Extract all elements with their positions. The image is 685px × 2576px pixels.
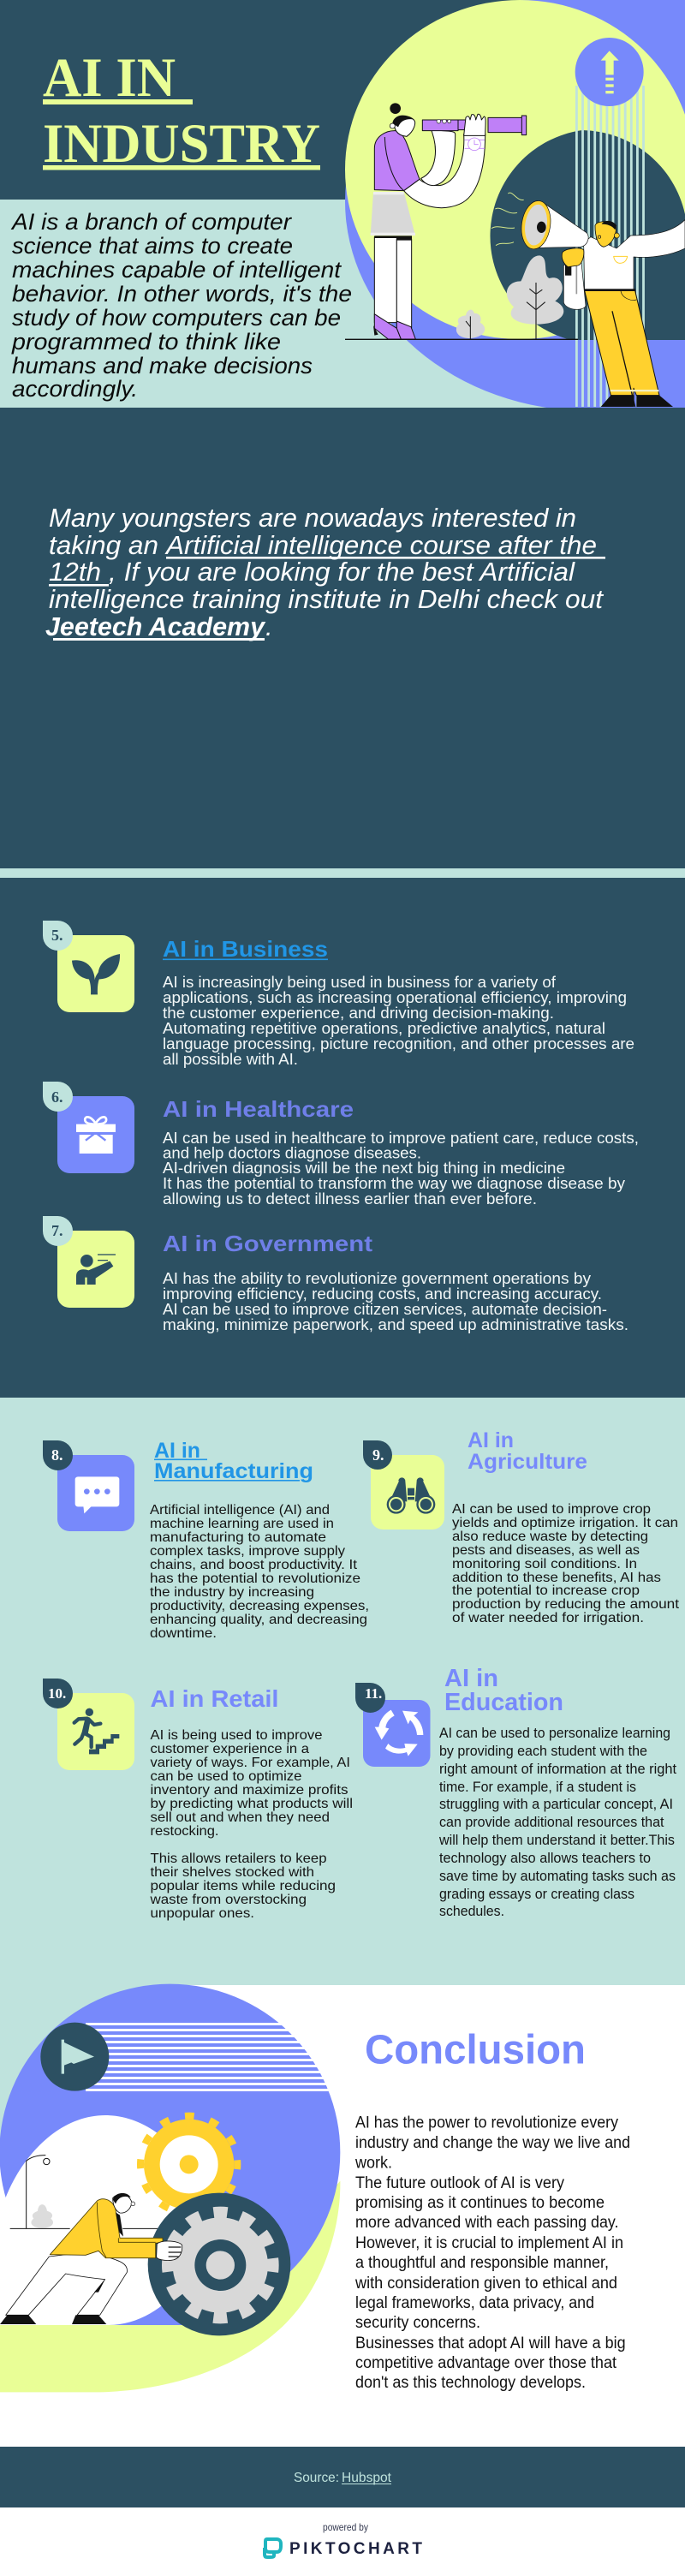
icon: presenter xyxy=(43,1216,134,1308)
illustration: grey gear xyxy=(148,2193,290,2335)
text block: AI in Manufacturing: manufacturing to automate xyxy=(150,1530,326,1545)
text block: conclusion: industry and change the way we live and xyxy=(355,2134,630,2152)
text block: AI in Government: AI can be used to improve citizen services, automate decision- xyxy=(163,1301,607,1318)
text block: AI in Business: Automating repetitive operations, predictive analytics, natural xyxy=(163,1020,605,1037)
text block: conclusion: legal frameworks, data privacy, and xyxy=(355,2294,594,2312)
text block: conclusion: with consideration given to ethical and xyxy=(354,2275,617,2293)
text block: conclusion: The future outlook of AI is very xyxy=(355,2174,564,2192)
text block: AI in Retail: customer experience in a xyxy=(151,1742,309,1756)
text block: introduction: study of how computers can be xyxy=(12,305,341,331)
text block: conclusion xyxy=(354,2028,630,2392)
text block: conclusion: Conclusion xyxy=(365,2028,586,2072)
illustration: yellow gear xyxy=(136,2112,241,2217)
text block: AI in Agriculture: monitoring soil conditions. In xyxy=(452,1557,637,1571)
text block: AI in Manufacturing: Manufacturing xyxy=(154,1459,313,1483)
text block: AI in Retail: AI in Retail xyxy=(151,1685,279,1712)
text block: AI in Education: right amount of information at the right xyxy=(439,1761,676,1777)
icon: plant: 5. xyxy=(51,927,63,944)
text block: AI in Business xyxy=(163,936,634,1068)
text block: AI in Healthcare: It has the potential to transform the way we diagnose disease by xyxy=(163,1175,625,1192)
icon: runner on stairs: 10. xyxy=(48,1685,66,1702)
text block: AI in Education: AI can be used to personalize learning xyxy=(439,1725,670,1741)
text block: AI in Education: by providing each student with the xyxy=(439,1743,647,1759)
text block: conclusion: security concerns. xyxy=(355,2314,480,2332)
text block: AI in Education: save time by automating tasks such as xyxy=(439,1868,676,1884)
text block: AI in Business: the customer experience, and driving decision-making. xyxy=(163,1005,554,1022)
text block: introduction: accordingly. xyxy=(12,376,138,402)
text block: course callout xyxy=(45,503,605,641)
text block: conclusion: promising as it continues to become xyxy=(355,2194,605,2212)
text block: course callout: . xyxy=(265,611,273,641)
icon: binoculars xyxy=(363,1440,444,1530)
icon: arrow up badge xyxy=(575,38,644,106)
footer: source xyxy=(0,2447,685,2507)
icon: recycle arrows xyxy=(355,1683,430,1767)
text block: AI in Government: AI has the ability to revolutionize government operations by xyxy=(163,1270,591,1287)
footer: Piktochart logo: PIKTOCHART xyxy=(289,2540,422,2558)
illustration: horizontal stripes xyxy=(86,2023,340,2091)
text block: AI in Healthcare xyxy=(163,1096,639,1208)
icon: chat bubble: 8. xyxy=(51,1446,63,1464)
text block: AI in Manufacturing: downtime. xyxy=(150,1626,217,1641)
text block: AI in Retail: inventory and maximize profits xyxy=(151,1783,348,1798)
text block: AI in Business: applications, such as increasing operational efficiency, improving xyxy=(163,989,627,1006)
text block: AI in Government xyxy=(163,1231,628,1333)
text block: AI in Business: AI is increasingly being used in business for a variety of xyxy=(163,974,557,991)
panel: business, healthcare, government xyxy=(0,878,685,1398)
text block: AI in Education: time. For example, if a student is xyxy=(439,1779,636,1795)
text block: AI in Manufacturing: the industry by increasing xyxy=(150,1585,314,1600)
text block: AI in Retail: AI is being used to improve xyxy=(151,1728,323,1743)
text block: AI in Retail: unpopular ones. xyxy=(151,1906,254,1921)
text block: course callout: , If you are looking for the best Artificial xyxy=(109,557,575,587)
icon: presenter: 7. xyxy=(51,1222,63,1239)
text block: introduction: science that aims to create xyxy=(12,233,293,259)
text block: AI in Retail: This allows retailers to keep xyxy=(151,1852,327,1866)
illustration: man with megaphone xyxy=(491,193,685,407)
text block: AI in Manufacturing: AI in xyxy=(154,1439,200,1463)
text block: conclusion: work. xyxy=(354,2155,392,2172)
text block: AI in Manufacturing: complex tasks, improve supply xyxy=(150,1544,345,1559)
text block: AI in Manufacturing: productivity, decreasing expenses, xyxy=(150,1599,369,1613)
text block: AI in Retail: their shelves stocked with xyxy=(151,1865,314,1880)
text block: introduction: programmed to think like xyxy=(11,329,281,355)
text block: AI in Education: grading essays or creating class xyxy=(439,1886,634,1902)
illustration: ground line xyxy=(345,339,578,340)
text block: course callout: taking an xyxy=(49,530,158,560)
text block: AI in Education: can provide additional resources that xyxy=(439,1814,664,1830)
text block: AI in Education: struggling with a particular concept, AI xyxy=(439,1796,673,1812)
text block: AI in Manufacturing xyxy=(150,1439,369,1641)
text block: course callout: intelligence training institute in Delhi check out xyxy=(49,584,604,614)
icon: recycle arrows: 11. xyxy=(365,1685,382,1702)
illustration: woman with telescope xyxy=(371,103,563,339)
text block: introduction: humans and make decisions xyxy=(12,353,313,379)
text block: AI in Education: technology also allows teachers to xyxy=(439,1850,651,1866)
text block: conclusion: a thoughtful and responsible manner, xyxy=(355,2254,609,2272)
icon: plant xyxy=(43,921,134,1012)
text block: conclusion: don't as this technology develops. xyxy=(355,2374,586,2392)
icon: gift: 6. xyxy=(51,1088,63,1106)
text block: AI in Government: improving efficiency, reducing costs, and increasing accuracy. xyxy=(163,1285,602,1303)
text block: course callout: 12th xyxy=(49,557,101,587)
text block: AI in Manufacturing: has the potential to revolutionize xyxy=(150,1571,360,1586)
text block: AI in Agriculture: addition to these benefits, AI has xyxy=(452,1571,661,1585)
panel: course callout xyxy=(0,408,685,878)
text block: AI in Healthcare: AI in Healthcare xyxy=(163,1096,354,1122)
footer: source: Hubspot xyxy=(342,2471,392,2485)
text block: course callout: Jeetech Academy xyxy=(45,611,266,641)
icon: binoculars: 9. xyxy=(372,1446,384,1464)
text block: AI in Agriculture: pests and diseases, as well as xyxy=(452,1543,640,1558)
icon: flag badge xyxy=(40,2023,109,2091)
panel: conclusion illustration xyxy=(0,1984,340,2392)
text block: AI in Agriculture: the potential to increase crop xyxy=(452,1583,640,1598)
text block: conclusion: Businesses that adopt AI will have a big xyxy=(355,2334,626,2352)
text block: AI in Manufacturing: enhancing quality, and decreasing xyxy=(150,1613,367,1627)
text block: AI in Retail xyxy=(149,1685,353,1921)
panel: hero xyxy=(0,0,685,411)
text block: AI in Retail: can be used to optimize xyxy=(151,1769,302,1784)
text block: AI in Business: AI in Business xyxy=(163,936,328,962)
text block: AI in Retail: by predicting what products will xyxy=(151,1797,353,1811)
text block: AI in Agriculture: Agriculture xyxy=(468,1450,587,1474)
footer: Piktochart logo xyxy=(265,2521,422,2558)
text block: AI in Manufacturing: chains, and boost productivity. It xyxy=(150,1558,358,1572)
text block: conclusion: However, it is crucial to implement AI in xyxy=(355,2234,623,2252)
icon: gift xyxy=(43,1082,134,1173)
text block: introduction xyxy=(10,209,352,402)
text block: AI in Retail: restocking. xyxy=(151,1824,219,1839)
text block: AI in Business: language processing, picture recognition, and other processes are xyxy=(163,1035,634,1052)
text block: AI in Agriculture xyxy=(452,1428,680,1625)
text block: AI in Agriculture: of water needed for irrigation. xyxy=(452,1611,644,1625)
text block: AI in Healthcare: AI can be used in healthcare to improve patient care, reduce costs, xyxy=(163,1130,639,1147)
text block: AI in Retail: waste from overstocking xyxy=(149,1893,307,1907)
text block: AI in Manufacturing: Artificial intelligence (AI) and xyxy=(150,1503,330,1518)
illustration: man pushing gear xyxy=(0,2193,182,2324)
text block: AI in Agriculture: AI can be used to improve crop xyxy=(452,1502,651,1517)
text block: conclusion: competitive advantage over those that xyxy=(355,2354,617,2372)
text block: AI in Agriculture: yields and optimize irrigation. It can xyxy=(452,1516,678,1530)
text block: AI in Government: AI in Government xyxy=(163,1231,372,1256)
text block: AI in Healthcare: and help doctors diagnose diseases. xyxy=(163,1144,421,1161)
title xyxy=(43,47,320,175)
panel: manufacturing, agriculture, retail, education xyxy=(0,1398,685,1985)
text block: AI in Healthcare: allowing us to detect illness earlier than ever before. xyxy=(163,1190,537,1208)
text block: course callout: Many youngsters are nowadays interested in xyxy=(49,503,576,533)
text block: AI in Government: making, minimize paperwork, and speed up administrative tasks. xyxy=(163,1316,628,1333)
text block: AI in Retail: variety of ways. For example, AI xyxy=(151,1756,350,1770)
illustration: vertical stripes xyxy=(575,86,645,407)
title: AI IN xyxy=(43,47,176,109)
text block: AI in Education: Education xyxy=(444,1689,563,1716)
title: INDUSTRY xyxy=(43,113,320,175)
text block: AI in Agriculture: AI in xyxy=(468,1428,514,1452)
text block: AI in Education: AI in xyxy=(444,1665,498,1692)
text block: AI in Agriculture: production by reducing the amount xyxy=(452,1597,680,1612)
text block: introduction: behavior. In other words, it's the xyxy=(12,281,352,307)
footer: source: Source: xyxy=(294,2471,339,2485)
text block: AI in Retail: sell out and when they need xyxy=(151,1810,330,1825)
footer: Piktochart logo: powered by xyxy=(323,2521,368,2533)
icon: chat bubble xyxy=(43,1440,134,1531)
icon: runner on stairs xyxy=(43,1679,134,1770)
illustration: street lamp and plant xyxy=(10,2156,160,2228)
text block: course callout: Artificial intelligence course after the xyxy=(164,530,597,560)
text block: AI in Retail: popular items while reducing xyxy=(151,1879,336,1893)
text block: introduction: AI is a branch of computer xyxy=(10,209,292,235)
text block: AI in Manufacturing: machine learning are used in xyxy=(150,1517,334,1531)
text block: AI in Business: all possible with AI. xyxy=(163,1051,298,1068)
text block: conclusion: AI has the power to revolutionize every xyxy=(355,2114,618,2132)
text block: AI in Agriculture: also reduce waste by detecting xyxy=(452,1530,648,1544)
text block: conclusion: more advanced with each passing day. xyxy=(355,2214,618,2232)
text block: introduction: machines capable of intelligent xyxy=(12,257,342,283)
text block: AI in Education: schedules. xyxy=(439,1903,504,1919)
text block: AI in Education: will help them understand it better.This xyxy=(438,1832,675,1848)
text block: AI in Education xyxy=(438,1665,676,1919)
text block: AI in Healthcare: AI-driven diagnosis will be the next big thing in medicine xyxy=(163,1160,565,1177)
